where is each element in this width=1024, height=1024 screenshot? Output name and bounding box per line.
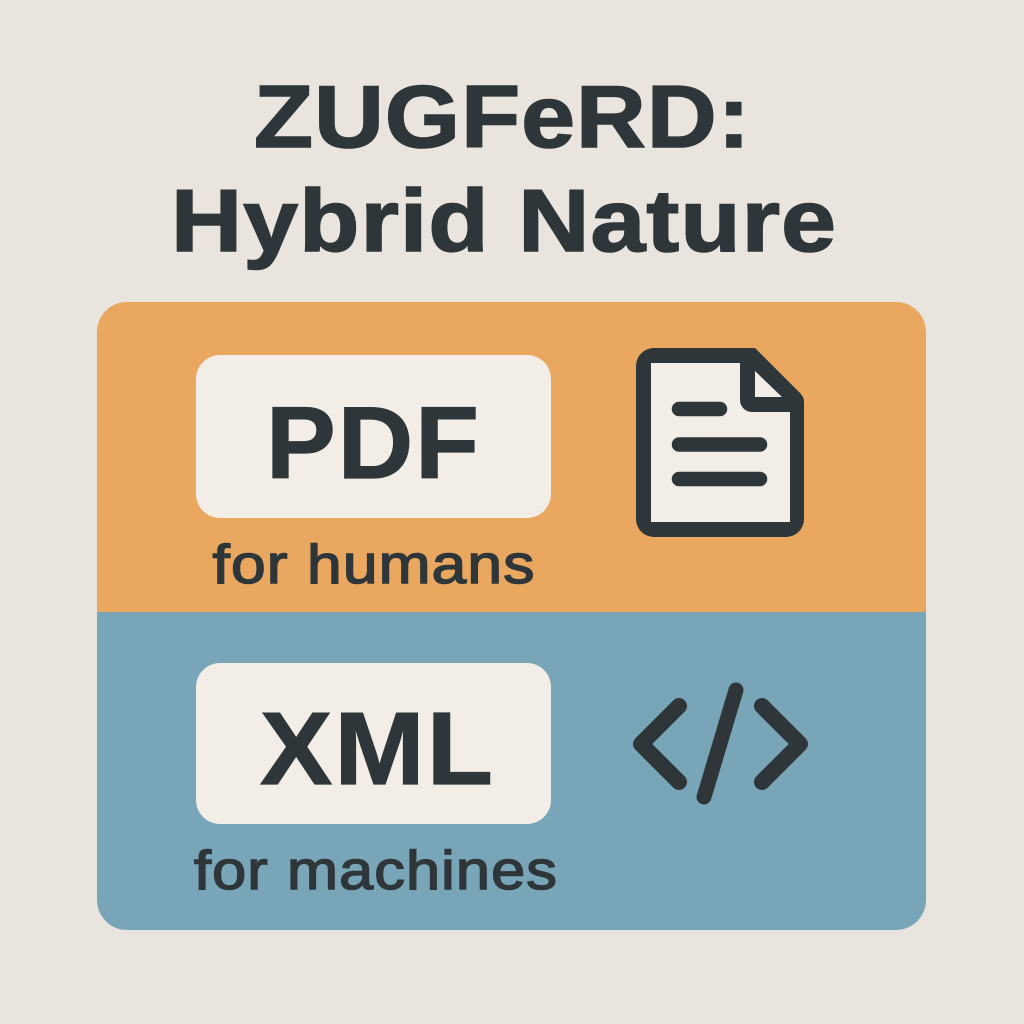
- caption: for machines: for machines: [194, 839, 558, 901]
- PDF label box: PDF: [266, 386, 481, 500]
- XML label box: [196, 663, 551, 824]
- icon: document: [636, 348, 804, 537]
- title: [171, 67, 837, 270]
- PDF label box: [196, 355, 551, 518]
- title: ZUGFeRD:: [254, 67, 751, 166]
- caption: for humans: for humans: [212, 533, 536, 595]
- title: Hybrid Nature: [171, 171, 837, 270]
- XML label box: XML: [260, 691, 495, 806]
- icon: code brackets: [641, 690, 800, 797]
- panel: PDF for humans: [97, 302, 926, 612]
- panel: XML for machines: [97, 612, 926, 930]
